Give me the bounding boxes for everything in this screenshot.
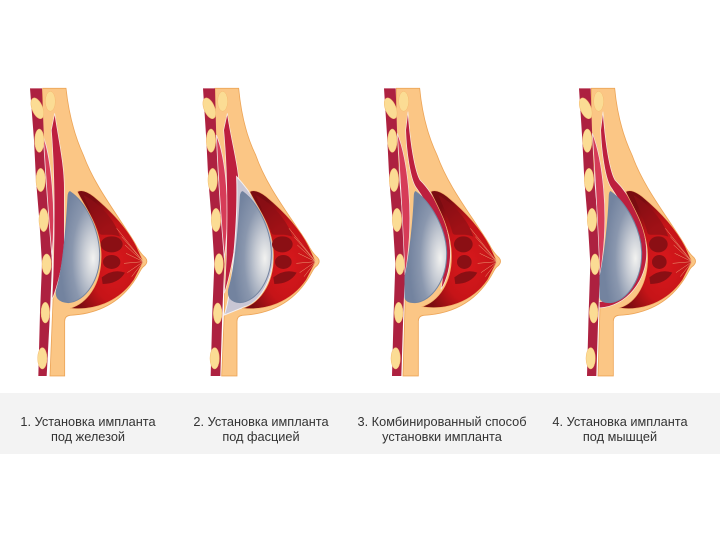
ribs xyxy=(382,91,409,369)
skin and fat xyxy=(396,88,501,376)
pectoralis major muscle xyxy=(51,113,64,300)
pectoralis minor muscle xyxy=(592,133,605,275)
diagram 3: combined placement xyxy=(382,88,501,376)
ribs xyxy=(28,91,55,369)
fascia pocket xyxy=(224,177,274,315)
mammary gland xyxy=(242,191,316,309)
ribs xyxy=(577,91,604,369)
caption 4: под мышцей xyxy=(583,428,657,444)
pectoralis minor muscle xyxy=(397,133,410,275)
implant xyxy=(405,192,447,303)
diagram 1: implant under gland xyxy=(28,88,147,376)
mammary gland xyxy=(619,191,692,309)
mammary gland xyxy=(70,191,143,309)
caption 4 xyxy=(552,414,688,444)
ribs xyxy=(200,91,228,369)
caption 3: 3. Комбинированный способ xyxy=(358,414,526,428)
caption 1: 1. Установка импланта xyxy=(20,414,156,428)
pectoralis major muscle around implant xyxy=(599,112,647,308)
caption 3 xyxy=(358,414,526,444)
caption 4: 4. Установка импланта xyxy=(552,414,688,428)
rib wall xyxy=(579,88,600,376)
mammary gland xyxy=(422,191,497,308)
pectoralis minor muscle xyxy=(43,137,54,257)
caption 2: 2. Установка импланта xyxy=(193,414,329,428)
pectoralis major muscle xyxy=(224,113,239,293)
diagram 2: implant under fascia xyxy=(200,88,319,376)
skin and fat xyxy=(591,88,696,376)
rib wall xyxy=(384,88,405,376)
rib wall xyxy=(30,88,52,376)
implant xyxy=(228,192,271,303)
rib wall xyxy=(203,88,224,376)
caption 1: под железой xyxy=(51,428,125,444)
caption 1 xyxy=(20,414,156,444)
caption 3: установки импланта xyxy=(382,428,502,444)
implant xyxy=(56,192,100,303)
caption 2 xyxy=(193,414,329,444)
caption 2: под фасцией xyxy=(222,428,300,444)
skin and fat xyxy=(214,88,319,376)
caption band xyxy=(0,393,720,454)
implant xyxy=(600,192,642,303)
diagram 4: implant under muscle xyxy=(577,88,696,376)
skin and fat xyxy=(42,88,147,376)
illustrations: four implant placement diagrams xyxy=(30,88,696,376)
pectoralis major muscle over implant xyxy=(406,112,450,289)
pectoralis minor muscle xyxy=(216,135,227,258)
